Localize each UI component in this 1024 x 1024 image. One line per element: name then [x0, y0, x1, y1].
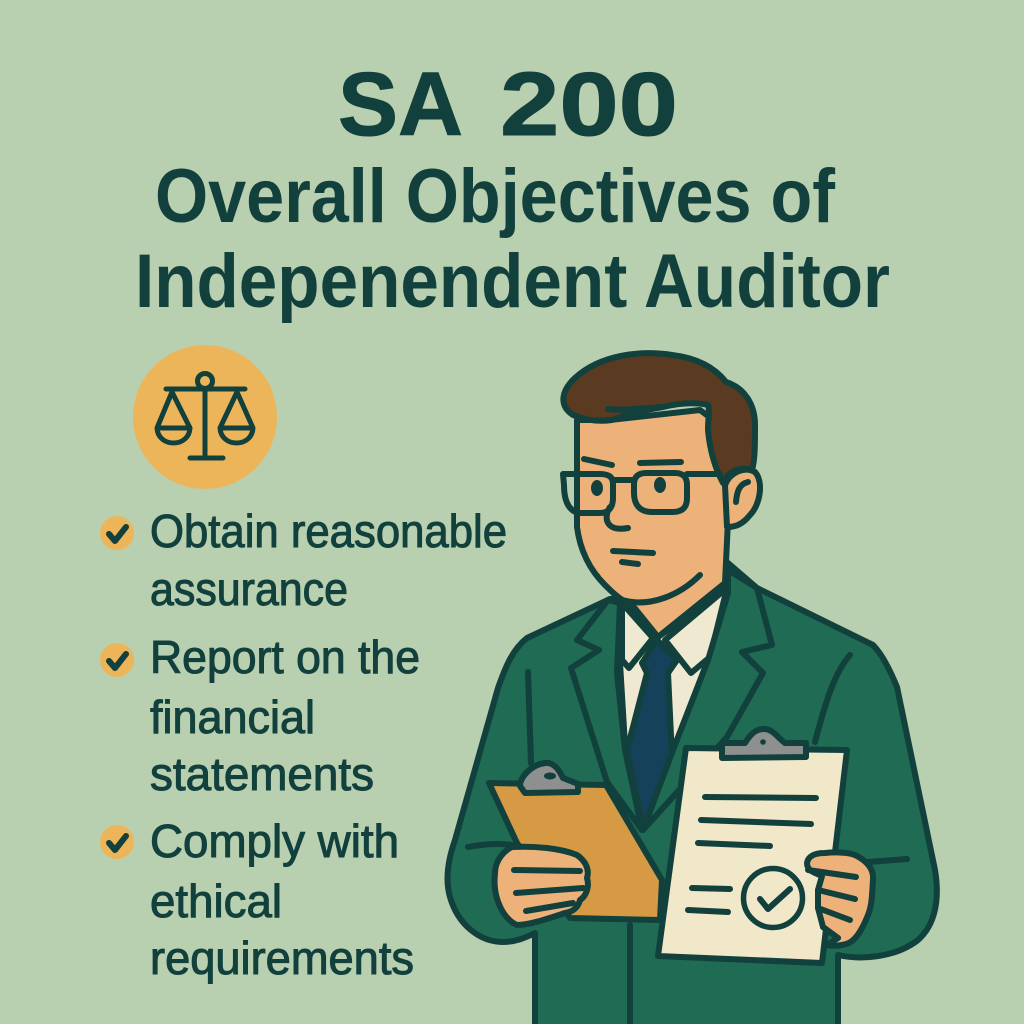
right clipboard paper	[658, 729, 847, 963]
ear	[725, 470, 760, 527]
item: obtain reasonable assurance	[100, 505, 507, 615]
item: comply with ethical requirements	[100, 815, 414, 984]
item: report on the financial statements	[100, 631, 420, 800]
objectives list	[100, 505, 507, 984]
hair	[563, 353, 755, 483]
necktie	[627, 640, 677, 827]
approval check mark	[744, 868, 802, 928]
shirt collar	[622, 588, 727, 673]
title	[135, 55, 890, 324]
glasses	[563, 473, 720, 513]
item: comply with ethical requirements: requirements	[150, 932, 414, 984]
nose and mouth	[607, 507, 653, 564]
left clipboard	[489, 763, 662, 920]
item: report on the financial statements: statements	[150, 748, 374, 800]
item: comply with ethical requirements: ethical	[150, 875, 282, 927]
suit	[448, 563, 937, 1024]
title: Indepenendent Auditor	[135, 239, 890, 324]
suit seams	[468, 655, 907, 1024]
item: report on the financial statements: financial	[150, 691, 315, 743]
icon: balance scales	[133, 345, 277, 489]
neck and face	[577, 410, 740, 637]
auditor figure	[448, 353, 937, 1024]
eyes and brows	[584, 459, 681, 496]
suit lapels	[571, 570, 772, 830]
title: Overall Objectives of	[155, 154, 836, 239]
item: obtain reasonable assurance: assurance	[150, 563, 348, 615]
title: SA	[338, 55, 460, 155]
item: obtain reasonable assurance: Obtain reasonable	[150, 505, 507, 557]
item: report on the financial statements: Report on the	[150, 631, 420, 683]
right hand	[807, 852, 873, 946]
item: comply with ethical requirements: Comply with	[150, 815, 399, 867]
left hand	[495, 847, 588, 925]
jaw line	[622, 575, 700, 602]
shirt	[620, 588, 727, 827]
title: 200	[500, 55, 678, 155]
